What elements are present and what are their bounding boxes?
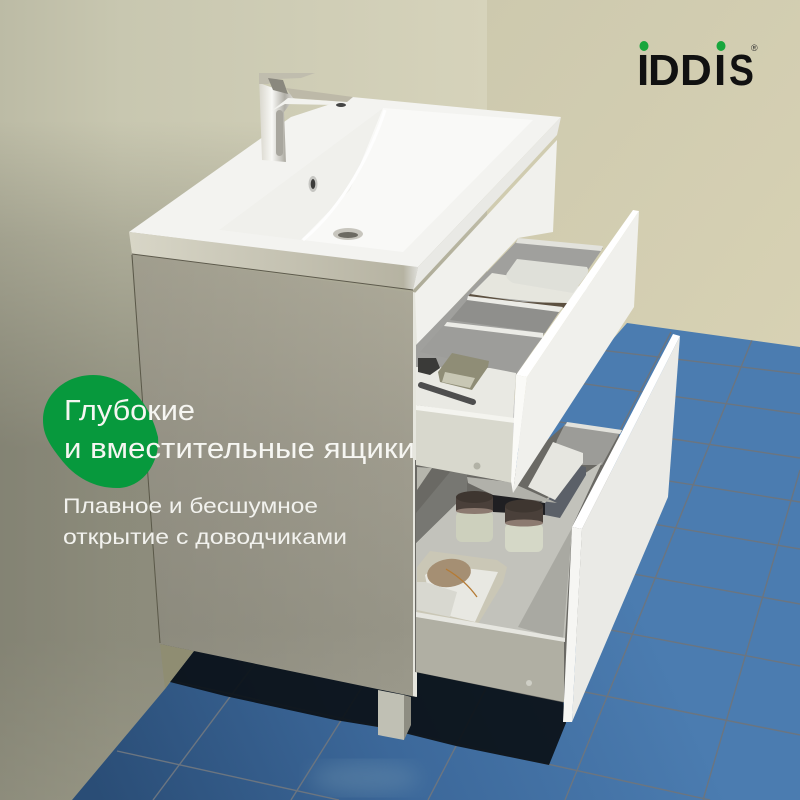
cabinet body [131, 140, 557, 740]
upper drawer front panel [511, 210, 639, 493]
drawer interior [416, 240, 603, 420]
rim top [129, 97, 561, 267]
paper and roll [468, 259, 590, 308]
glass bottle [438, 353, 489, 390]
rear wall [550, 424, 620, 465]
cabinet shadow on floor [160, 644, 566, 765]
blue tiled floor [72, 323, 800, 800]
divider rear [450, 296, 563, 333]
lower drawer front panel [563, 334, 680, 722]
basin bowl [219, 108, 533, 252]
background: right wall [487, 0, 800, 400]
cabinet leg [378, 690, 411, 740]
upper drawer [416, 210, 639, 493]
drawer inner left wall [416, 472, 467, 543]
drawer side front [416, 614, 564, 702]
drawer floor [416, 462, 602, 640]
towel [416, 367, 516, 419]
razor [421, 385, 473, 402]
drain [333, 228, 363, 240]
screw [526, 680, 532, 686]
heading [64, 395, 415, 465]
jar left [456, 491, 493, 542]
logo: IDDI [637, 46, 726, 95]
heading: Глубокие [64, 395, 195, 427]
wall wedge beside cabinet [160, 644, 194, 689]
tray [417, 551, 507, 624]
screw [474, 462, 480, 470]
logo: S [729, 45, 754, 95]
background: left wall [0, 0, 488, 800]
subheading: Плавное и бесшумное [63, 495, 318, 518]
faucet [259, 73, 353, 162]
logo: ® [751, 43, 758, 53]
drawer inner right wall [518, 528, 572, 640]
washbasin [129, 97, 561, 290]
small holder [418, 358, 440, 375]
subheading: открытие с доводчиками [63, 526, 347, 549]
jar right [505, 500, 543, 552]
divider front [420, 322, 543, 373]
lower drawer [415, 334, 680, 722]
overflow hole [308, 176, 318, 192]
logo [637, 41, 758, 95]
rim front lip [129, 232, 418, 290]
drawer cavity [415, 423, 620, 703]
towels [467, 442, 586, 518]
heading: и вместительные ящики [64, 433, 415, 465]
subheading [63, 495, 347, 549]
green blob [43, 375, 158, 488]
drawer side front [416, 408, 513, 483]
cabinet side band [415, 140, 557, 345]
cabinet front face [131, 254, 416, 697]
